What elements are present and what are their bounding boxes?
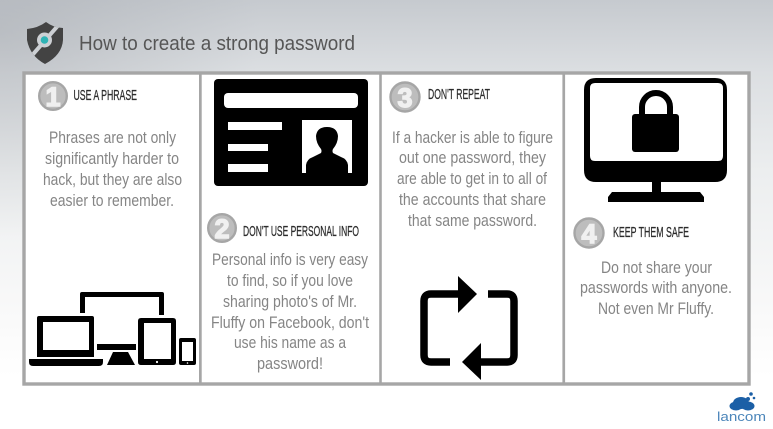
badge: number 1 <box>39 82 67 112</box>
text: phrase explanation: easier to remember. <box>50 191 174 210</box>
badge: number 2 <box>208 214 236 244</box>
title: How to create a strong password <box>79 33 355 55</box>
text: personal info explanation: Fluffy on Facebook, don't <box>211 313 369 332</box>
badge: number 4 <box>574 218 604 249</box>
wordmark: lancom <box>717 409 766 424</box>
text: repeat explanation: that same password. <box>408 211 537 230</box>
panel: don't repeat <box>390 82 553 380</box>
text: repeat explanation <box>392 128 553 230</box>
heading: use a phrase: USE A PHRASE <box>74 87 137 104</box>
text: phrase explanation: hack, but they are also <box>43 170 182 189</box>
icon: repeat arrows <box>424 276 514 380</box>
text: phrase explanation <box>43 128 182 210</box>
text: keep safe explanation: Not even Mr Fluffy. <box>598 299 714 318</box>
panel: keep them safe <box>574 78 732 318</box>
text: keep safe explanation: passwords with anyone. <box>580 278 732 297</box>
heading: keep them safe: KEEP THEM SAFE <box>613 224 689 241</box>
text: phrase explanation: Phrases are not only <box>49 128 176 147</box>
logo: lancom <box>717 392 766 424</box>
icon: blue cloud <box>730 392 755 410</box>
badge: number 1: 1 <box>45 82 61 112</box>
text: repeat explanation: If a hacker is able to figure <box>392 128 553 147</box>
badge: number 4: 4 <box>581 219 597 249</box>
heading: don't repeat: DON'T REPEAT <box>428 86 490 103</box>
icon: monitor with padlock <box>584 78 727 202</box>
text: repeat explanation: the accounts that share <box>399 190 546 209</box>
icon: id card <box>214 79 368 186</box>
badge: number 3 <box>390 82 420 113</box>
text: repeat explanation: are able to get in to all of <box>397 169 547 188</box>
icon: computer, laptop, tablet and phone <box>29 292 196 366</box>
heading: don't use personal info: DON'T USE PERSONAL INFO <box>243 223 359 240</box>
text: phrase explanation: significantly harder to <box>45 149 179 168</box>
icon: shield logo <box>27 21 63 64</box>
text: personal info explanation: to find, so if you love <box>227 271 353 290</box>
panel frame with four columns <box>24 72 749 384</box>
text: personal info explanation: Personal info is very easy <box>212 250 368 269</box>
badge: number 3: 3 <box>397 83 413 113</box>
text: repeat explanation: out one password, they <box>399 148 546 167</box>
panel: don't use personal info <box>208 79 369 373</box>
text: keep safe explanation: Do not share your <box>601 258 712 277</box>
panel: use a phrase <box>29 82 196 366</box>
text: personal info explanation: use his name as a <box>234 333 346 352</box>
badge: number 2: 2 <box>214 214 230 244</box>
text: personal info explanation: sharing photo's of Mr. <box>223 292 357 311</box>
text: personal info explanation <box>211 250 369 373</box>
text: personal info explanation: password! <box>257 354 323 373</box>
text: keep safe explanation <box>580 258 732 318</box>
